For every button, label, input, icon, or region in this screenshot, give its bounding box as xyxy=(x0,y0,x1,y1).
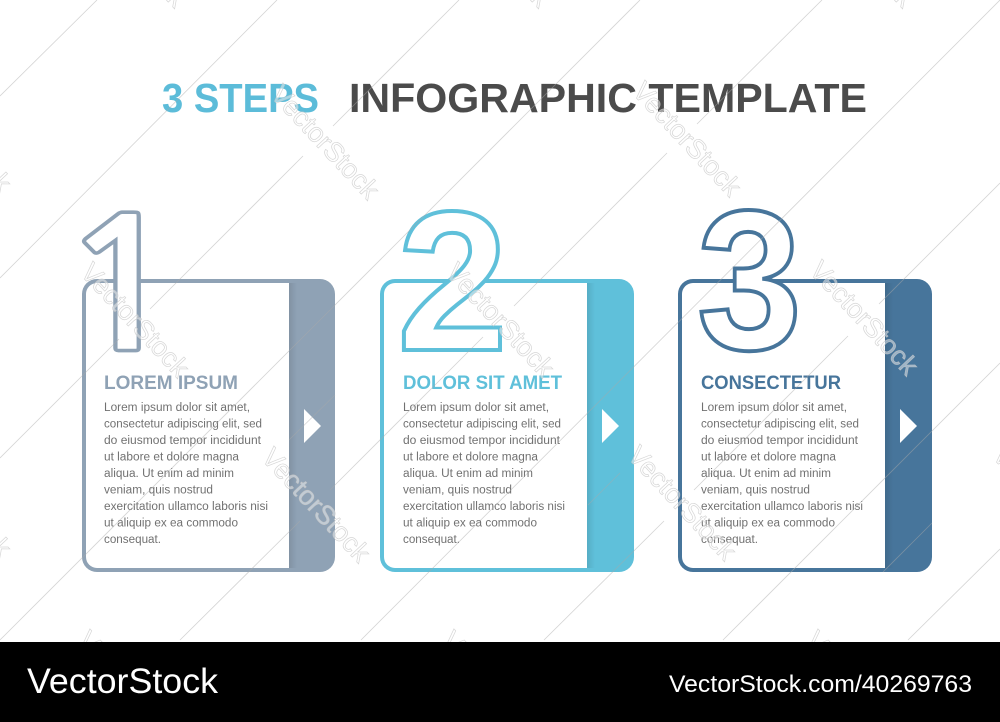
body text 1: exercitation ullamco laboris nisi xyxy=(104,501,268,513)
body text 3: do eiusmod tempor incididunt xyxy=(701,435,859,447)
body text 1: Lorem ipsum dolor sit amet, xyxy=(104,402,250,414)
body text 1: aliqua. Ut enim ad minim xyxy=(104,468,234,480)
watermark logos: VectorStock xyxy=(622,440,742,566)
heading 1: LOREM IPSUM xyxy=(104,373,238,394)
body text 3: aliqua. Ut enim ad minim xyxy=(701,468,831,480)
body text 3: consectetur adipiscing elit, sed xyxy=(701,418,859,430)
heading 3: CONSECTETUR xyxy=(701,373,841,394)
card frame 2 xyxy=(380,279,634,572)
watermark logos: VectorStock xyxy=(256,442,376,568)
card sheet 2 xyxy=(384,283,587,568)
body text 1 xyxy=(104,402,268,546)
footer logo: VectorStock xyxy=(27,662,219,701)
panel: step 1 xyxy=(56,197,335,572)
body text 3: ut aliquip ex ea commodo xyxy=(701,518,835,530)
number 3: 3 xyxy=(697,170,802,392)
body text 2: Lorem ipsum dolor sit amet, xyxy=(403,402,549,414)
body text 1: consectetur adipiscing elit, sed xyxy=(104,418,262,430)
body text 1: ut aliquip ex ea commodo xyxy=(104,518,238,530)
card sheet 1 xyxy=(86,283,289,568)
body text 2: aliqua. Ut enim ad minim xyxy=(403,468,533,480)
body text 1: do eiusmod tempor incididunt xyxy=(104,435,262,447)
body text 3: exercitation ullamco laboris nisi xyxy=(701,501,863,513)
arrow 2 xyxy=(602,409,619,443)
title: INFOGRAPHIC TEMPLATE xyxy=(349,75,867,121)
arrow 1 xyxy=(304,409,321,443)
body text 2: exercitation ullamco laboris nisi xyxy=(403,501,565,513)
number 1: 1 xyxy=(56,197,188,377)
panel: step 3 xyxy=(678,170,932,572)
title: 3 STEPS xyxy=(162,75,319,121)
body text 2 xyxy=(403,402,565,546)
body text 1: consequat. xyxy=(104,534,161,546)
body text 3: veniam, quis nostrud xyxy=(701,484,810,496)
body text 2: veniam, quis nostrud xyxy=(403,484,512,496)
body text 2: consequat. xyxy=(403,534,460,546)
number 2: 2 xyxy=(397,171,508,393)
watermark logos: VectorStock xyxy=(75,257,195,383)
body text 1: veniam, quis nostrud xyxy=(104,484,213,496)
footer bar xyxy=(0,642,1000,722)
body text 3: Lorem ipsum dolor sit amet, xyxy=(701,402,847,414)
card frame 3 xyxy=(678,279,932,572)
body text 2: do eiusmod tempor incididunt xyxy=(403,435,561,447)
watermark logos: VectorStock xyxy=(627,76,747,202)
body text 2: ut labore et dolore magna xyxy=(403,452,539,464)
card sheet 3 xyxy=(682,283,885,568)
panel: step 2 xyxy=(380,171,634,572)
watermark logos: VectorStock xyxy=(440,257,560,383)
body text 3 xyxy=(701,402,863,546)
heading 2: DOLOR SIT AMET xyxy=(403,373,562,394)
body text 3: consequat. xyxy=(701,534,758,546)
body text 2: consectetur adipiscing elit, sed xyxy=(403,418,561,430)
body text 3: ut labore et dolore magna xyxy=(701,452,837,464)
footer image id: VectorStock.com/40269763 xyxy=(669,671,972,698)
body text 2: ut aliquip ex ea commodo xyxy=(403,518,537,530)
watermark logos: VectorStock xyxy=(265,79,385,205)
card frame 1 xyxy=(82,279,335,572)
arrow 3 xyxy=(900,409,917,443)
watermark logos: VectorStock xyxy=(804,255,924,381)
body text 1: ut labore et dolore magna xyxy=(104,452,240,464)
